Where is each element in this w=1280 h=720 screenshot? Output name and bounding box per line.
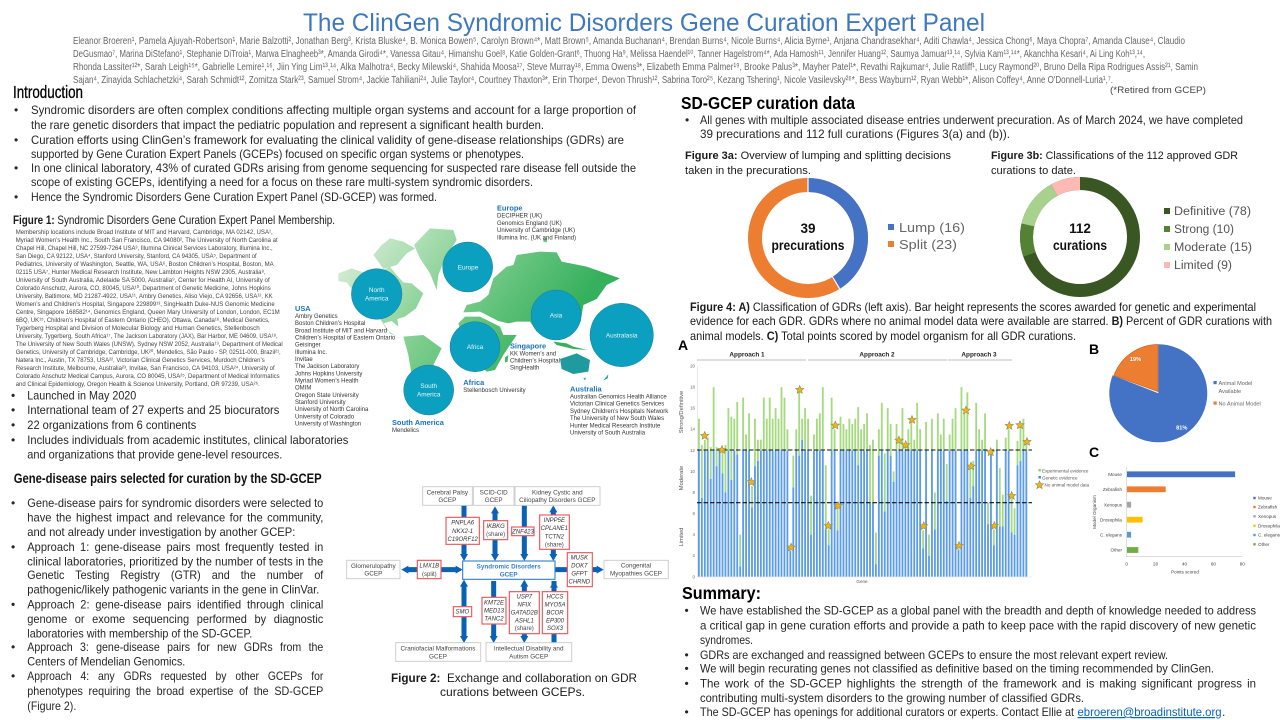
axis labels: C. elegans xyxy=(1100,532,1123,537)
heading: summary: Summary: xyxy=(682,583,761,603)
bars xyxy=(699,387,1026,577)
Australia members: University of South Australia xyxy=(570,430,646,436)
membership locations text: Centre, Singapore 168582¹⁴, Genomics England, Queen Mary University of London, London, EC1M xyxy=(16,309,280,316)
chart B: animal model pie: B xyxy=(1089,341,1099,357)
y axis: 4 xyxy=(693,532,696,537)
donut chart: curations xyxy=(1026,184,1134,290)
y axis: 0 xyxy=(693,574,696,579)
figure 4 caption: evidence for each GDR. GDRs where no animal model data were available are starred. B) Percent of GDR curations with xyxy=(690,315,1272,328)
approach bullets: and not already under investigation by another GCEP: xyxy=(27,525,295,539)
GCEP labels: Ciliopathy Disorders GCEP xyxy=(519,497,595,504)
membership locations text: Chapel Hill, Chapel Hill, NC 27599-7264 USA³, Illumina Clinical Services Laboratory, Illumina Inc., xyxy=(16,245,273,252)
author list xyxy=(73,36,1206,96)
Singapore members: Children’s Hospital xyxy=(510,359,560,365)
donut chart: precurations: precurations xyxy=(772,238,844,253)
approach bullets: Approach 2: gene-disease pairs identified through clinical xyxy=(27,598,323,612)
panel: curation data xyxy=(681,93,1243,141)
summary bullets: The work of the SD-GCEP highlights the strength of the framework and is making significant progress in xyxy=(700,676,1256,690)
legend: chart B xyxy=(1214,381,1261,407)
panel: summary xyxy=(682,583,1256,719)
approach bullets: Approach 3: gene-disease pairs for new GDRs from the xyxy=(27,640,324,654)
membership locations text: Colorado Anschutz Medical Campus, Aurora, CO 80045, USA²⁵, Department of Medical Informatics xyxy=(16,373,280,380)
gene labels: IKBKG xyxy=(487,524,505,530)
Europe members: Genomics England (UK) xyxy=(497,221,562,227)
summary bullets: The SD-GCEP has openings for additional curators or experts. Contact Ellie at xyxy=(700,705,1075,719)
figure 3a caption: Figure 3a: Overview of lumping and splitting decisions xyxy=(685,150,951,162)
membership locations text: Pediatrics, University of Washington, Seattle, WA, USA⁶, Boston Children’s Hospital, Boston, MA xyxy=(16,261,274,268)
continent labels: America xyxy=(417,392,441,398)
GCEP labels xyxy=(351,489,662,660)
Europe members: DECIPHER (UK) xyxy=(497,214,542,220)
y axis: 8 xyxy=(693,490,696,495)
gene labels: KMT2E xyxy=(484,600,505,606)
Australia members: Victorian Clinical Genetics Services xyxy=(570,402,664,408)
approach bullets: (Figure 2). xyxy=(27,699,76,713)
South America members: Mendelics xyxy=(392,428,419,434)
gene labels: BCOR xyxy=(546,610,564,616)
donut chart: precurations: 39 xyxy=(800,221,816,236)
continent labels: Australasia xyxy=(606,332,638,340)
introduction bullets: Curation efforts using ClinGen’s framework for evaluating the clinical validity of gene-disease relationships (GDRs) are xyxy=(31,133,624,147)
gene labels: INPP5E xyxy=(544,518,566,524)
USA members: Broad Institute of MIT and Harvard xyxy=(295,328,387,334)
gene labels: (share) xyxy=(545,542,564,548)
Singapore members: KK Women’s and xyxy=(510,352,556,358)
GCEP labels: Kidney Cystic and xyxy=(532,489,583,496)
figure 4 caption xyxy=(690,301,1272,343)
panel: gene-disease pairs xyxy=(11,471,324,713)
introduction bullets: In one clinical laboratory, 43% of curated GDRs arising from genome sequencing for suspected rare disease fell outside the xyxy=(31,161,636,175)
Australia members xyxy=(570,384,669,436)
gene labels: GFPT xyxy=(571,572,589,578)
approach bullets: clinical laboratories, prioritized by the number of tests in the xyxy=(27,554,324,568)
approach bullets: • xyxy=(11,496,15,510)
gene labels: (share) xyxy=(486,532,505,538)
y axis: 10 xyxy=(690,469,696,474)
legend: chart B: Animal Model xyxy=(1218,381,1252,387)
summary bullets: syndromes. xyxy=(700,633,753,647)
introduction bullets: • xyxy=(14,161,18,175)
gene labels: NKX2-1 xyxy=(452,529,473,535)
curation data bullet xyxy=(685,113,1243,141)
legend: chart C: C. elegans xyxy=(1258,533,1280,538)
approach bullets: pathogenic/likely pathogenic variants in the gene in ClinVar. xyxy=(27,582,319,596)
membership locations text: Women’s and Children’s Hospital, Singapore 229899¹³, SingHealth Duke-NUS Genomic Medicine xyxy=(16,301,275,308)
y axis: 6 xyxy=(693,511,696,516)
heading: curation data: SD-GCEP curation data xyxy=(681,93,855,113)
gene labels: MYO5A xyxy=(545,602,565,608)
approach bullets: have the highest impact and relevance for the community, xyxy=(27,510,323,524)
USA members: Johns Hopkins University xyxy=(295,371,362,377)
Australia members: Hunter Medical Research Institute xyxy=(570,423,661,429)
membership bullets: International team of 27 experts and 25 biocurators xyxy=(27,403,279,417)
continent labels: Europe xyxy=(458,264,479,272)
legend: curations xyxy=(1164,206,1252,272)
legend: curations: Moderate (15) xyxy=(1174,242,1252,254)
legend: chart A: Genetic evidence xyxy=(1042,475,1078,480)
gene labels: ASHL1 xyxy=(514,618,534,624)
membership locations text: Myriad Women’s Health Inc., South San Francisco, CA 94080², The University of North Carolina at xyxy=(16,237,278,244)
heading: introduction: Introduction xyxy=(13,82,83,102)
membership locations text: Natera Inc., Austin, TX 78753, USA²², Victorian Clinical Genetics Services, Murdoch Children’s xyxy=(16,357,265,364)
legend: chart C: Xenopus xyxy=(1258,514,1277,519)
figure 4 caption: Figure 4: A) Classification of GDRs (left axis). Bar height represents the scores awarded for genetic and experimental xyxy=(690,301,1256,314)
y axis xyxy=(679,364,1032,584)
y axis: 12 xyxy=(690,448,696,453)
legend: chart B: Available xyxy=(1218,389,1241,395)
introduction bullets: supported by Gene Curation Expert Panels (GCEPs) focused on specific organ systems or phenotypes. xyxy=(31,147,524,161)
gene labels: (share) xyxy=(515,626,534,632)
axis labels xyxy=(1092,472,1245,575)
y axis: Strong/Definitive xyxy=(679,391,685,433)
arrows xyxy=(407,505,597,643)
membership bullets: • xyxy=(11,433,15,447)
gene labels: EP300 xyxy=(546,618,565,624)
summary bullets: GDRs are exchanged and reassigned between GCEPs to ensure the most relevant expert review. xyxy=(700,648,1168,662)
membership locations text: Membership locations include Broad Institute of MIT and Harvard, Cambridge, MA 02142, USA¹, xyxy=(16,229,273,236)
introduction bullets: Hence the Syndromic Disorders Gene Curation Expert Panel (SD-GCEP) was formed. xyxy=(31,190,437,204)
USA members: Oregon State University xyxy=(295,393,359,399)
membership locations text: San Diego, CA 92122, USA⁴, Stanford University, Stanford, CA 94305, USA⁵, Department of xyxy=(16,253,257,260)
USA members: Boston Children’s Hospital xyxy=(295,321,365,327)
Africa members: Stellenbosch University xyxy=(463,388,526,394)
membership locations text: 02115 USA⁷, Hunter Medical Research Institute, New Lambton Heights NSW 2305, Australia⁸, xyxy=(16,269,266,276)
axis labels: Xenopus xyxy=(1104,502,1123,507)
membership locations text: Genetics, University of Cambridge, Cambridge, UK²⁰, Mendelics, São Paulo - SP, 02511-000, Brazil²¹, xyxy=(16,349,281,356)
GCEP labels: Glomerulopathy xyxy=(351,563,397,570)
introduction bullets: scope of existing GCEPs, identifying a need for a focus on these rare multi-system syndromic disorders. xyxy=(31,175,533,189)
summary bullets: contributing multi-system disorders to the growing number of classified GDRs. xyxy=(700,691,1084,705)
membership bullets: 22 organizations from 6 continents xyxy=(27,418,196,432)
continent labels: North xyxy=(369,287,385,294)
Europe members xyxy=(497,204,576,241)
approach bullets: Approach 1: gene-disease pairs most frequently tested in xyxy=(27,540,323,554)
figure 3b caption: curations to date. xyxy=(991,165,1076,177)
introduction bullets: • xyxy=(14,103,18,117)
approach bullets: genome or exome sequencing performed by diagnostic xyxy=(27,612,323,626)
USA members: Ambry Genetics xyxy=(295,314,338,320)
pie slices: 19% xyxy=(1130,357,1141,363)
legend: chart A: No animal model data xyxy=(1044,483,1090,488)
continent labels: America xyxy=(365,296,389,302)
axis labels: Mouse xyxy=(1108,472,1122,477)
summary bullets: • xyxy=(684,662,689,676)
summary bullets: ebroeren@broadinstitute.org xyxy=(1078,705,1222,719)
legend: chart A xyxy=(1035,468,1090,489)
curation data bullet: All genes with multiple associated disease entries underwent precuration. As of March 2024, we have completed xyxy=(700,113,1243,127)
membership locations text: Colorado Anschutz, Aurora, CO, 80045, USA¹⁰, Department of Genetic Medicine, Johns Hopkins xyxy=(16,285,271,292)
Singapore members xyxy=(510,342,560,372)
y axis: 14 xyxy=(690,427,696,432)
South America members xyxy=(392,418,445,434)
introduction bullets: Syndromic disorders are often complex conditions affecting multiple organ systems and account for a large proportion of xyxy=(31,103,637,117)
legend: precurations xyxy=(888,220,965,252)
Syndromic Disorders GCEP box: Syndromic Disorders xyxy=(477,563,541,570)
GCEP labels: SCID-CID xyxy=(480,489,508,496)
Africa members: Africa xyxy=(463,378,485,387)
membership locations text: and Clinical Epidemiology, Oregon Health & Science University, Portland, OR 97239, USA²⁶. xyxy=(16,381,260,388)
figure 2 caption: Figure 2: Exchange and collaboration on GDR xyxy=(391,671,637,685)
donut chart: curations: 112 xyxy=(1069,221,1091,236)
figure 4 caption: animal models. C) Total points scored by model organism for all GDR curations. xyxy=(690,330,1076,343)
Australia members: Sydney Children’s Hospitals Network xyxy=(570,409,669,415)
gene labels: NFIX xyxy=(518,602,532,608)
USA members: Stanford University xyxy=(295,400,346,406)
pie slices: 81% xyxy=(1176,425,1187,431)
continent labels: Asia xyxy=(550,312,563,320)
legend: chart C: Zebrafish xyxy=(1258,505,1278,510)
axis labels: Drosophila xyxy=(1100,517,1122,522)
USA members: Illumina Inc. xyxy=(295,350,327,356)
membership locations text xyxy=(16,229,283,388)
approach bullets: • xyxy=(11,540,15,554)
continent labels xyxy=(365,264,638,398)
USA members: OMIM xyxy=(295,386,311,392)
USA members: The Jackson Laboratory xyxy=(295,364,359,370)
introduction bullets: • xyxy=(14,190,18,204)
stars: no animal model data xyxy=(701,386,1031,551)
membership locations text: The University of New South Wales (UNSW), Sydney NSW 2052, Australia¹⁹, Department of Medical xyxy=(16,341,283,348)
gene labels: LMX1B xyxy=(420,564,439,570)
GCEP labels: Congenital xyxy=(621,562,651,569)
approach bullets xyxy=(11,496,324,713)
gene labels: GATAD2B xyxy=(511,610,538,616)
gene labels: DOK7 xyxy=(571,564,588,570)
USA members: University of North Carolina xyxy=(295,407,369,413)
approach bullets: Gene-disease pairs for syndromic disorders were selected to xyxy=(27,496,324,510)
legend: chart B: No Animal Model xyxy=(1218,401,1261,407)
arrowheads xyxy=(401,505,604,643)
continent labels: South xyxy=(420,383,437,390)
Singapore members: SingHealth xyxy=(510,366,539,372)
approach bullets: • xyxy=(11,598,15,612)
GCEP labels: Intellectual Disability and xyxy=(494,645,564,652)
Singapore members: Singapore xyxy=(510,342,546,350)
figure 2: exchange diagram xyxy=(347,487,668,661)
gene labels: C19ORF12 xyxy=(448,537,478,543)
y axis: 20 xyxy=(690,364,696,368)
legend: chart A: Experimental evidence xyxy=(1042,468,1089,473)
approach bullets: Approach 4: any GDRs requested by other GCEPs for xyxy=(27,669,323,683)
approach bullets: Genetic Testing Registry (GTR) and the number of xyxy=(27,568,324,582)
membership bullets: • xyxy=(11,418,15,432)
membership bullets: Includes individuals from academic institutes, clinical laboratories xyxy=(27,433,348,447)
threshold lines xyxy=(697,450,1032,503)
summary bullets xyxy=(684,604,1256,719)
curation data bullet: • xyxy=(685,113,689,127)
map landmasses xyxy=(338,228,620,380)
USA members: USA xyxy=(295,304,311,313)
chart A: GDR classification bars xyxy=(678,337,1090,584)
USA members: Myriad Women’s Health xyxy=(295,378,358,384)
USA members: Geisinger xyxy=(295,343,321,349)
approach headers xyxy=(697,352,1012,360)
approach headers: Approach 2 xyxy=(859,352,895,358)
figure 1 caption: Figure 1: Syndromic Disorders Gene Curation Expert Panel Membership. xyxy=(13,213,335,227)
USA members: University of Colorado xyxy=(295,414,355,420)
axis labels: 20 xyxy=(1153,562,1159,566)
summary bullets: • xyxy=(684,676,689,690)
membership bullets: • xyxy=(11,403,15,417)
axis labels: 0 xyxy=(1125,562,1128,566)
Syndromic Disorders GCEP box: GCEP xyxy=(500,571,518,578)
chart C: points by model organism: C xyxy=(1089,444,1099,460)
heading: gene-disease pairs: Gene-disease pairs selected for curation by the SD-GCEP xyxy=(14,471,322,487)
legend: curations: Strong (10) xyxy=(1174,224,1234,236)
figure 3a caption xyxy=(685,150,951,177)
Australia members: The University of New South Wales xyxy=(570,416,664,422)
gene labels: CPLANE1 xyxy=(541,526,568,532)
introduction bullets: the rare genetic disorders that impact the pediatric population and represent a significant health burden. xyxy=(31,118,544,132)
y axis: 2 xyxy=(693,553,696,558)
Europe members: University of Cambridge (UK) xyxy=(497,228,575,234)
South America members: South America xyxy=(392,418,445,427)
gene labels: TCTN2 xyxy=(545,534,565,540)
membership locations text: Research Institute, Melbourne, Australia²³, Invitae, San Francisco, CA 94103, USA²⁴, University of xyxy=(16,365,275,372)
horizontal bars xyxy=(1127,471,1235,553)
axis labels: 80 xyxy=(1240,562,1245,566)
gene labels: USP7 xyxy=(517,594,533,600)
figure 3a caption: taken in the precurations. xyxy=(685,165,811,177)
title: The ClinGen Syndromic Disorders Gene Curation Expert Panel xyxy=(303,9,985,37)
introduction bullets: • xyxy=(14,133,18,147)
legend: chart C: Drosophila xyxy=(1258,523,1280,528)
y axis: Moderate xyxy=(679,466,685,490)
donut chart: curations: curations xyxy=(1053,238,1107,253)
membership bullets: • xyxy=(11,388,15,402)
axis labels: 40 xyxy=(1182,562,1187,566)
continent circles xyxy=(351,242,653,415)
GCEP labels: Myopathies GCEP xyxy=(610,571,662,578)
gene labels: TANC2 xyxy=(484,617,504,623)
Europe members: Europe xyxy=(497,204,522,212)
figure 3b caption xyxy=(991,150,1238,177)
panel letter A: A xyxy=(678,337,688,353)
introduction bullets xyxy=(14,103,637,204)
y axis: 18 xyxy=(690,384,696,390)
Africa members xyxy=(463,378,526,394)
approach headers: Approach 1 xyxy=(729,352,765,358)
summary bullets: • xyxy=(684,705,689,719)
gene labels: MUSK xyxy=(571,556,589,562)
axis labels: Other xyxy=(1110,548,1122,553)
membership locations text: University, Baltimore, MD 21287-4922, USA¹¹, Ambry Genetics, Aliso Viejo, CA 92656, USA¹², KK xyxy=(16,293,273,300)
gene labels: SOX3 xyxy=(547,626,564,632)
membership bullets: and organizations that provide gene-level resources. xyxy=(27,448,282,462)
figure 2 caption: curations between GCEPs. xyxy=(440,685,585,699)
GCEP labels: GCEP xyxy=(438,497,456,504)
chart B: animal model pie xyxy=(1089,341,1261,442)
summary bullets: a critical gap in gene curation efforts and provide a path to keep pace with the rapid discovery of new genetic xyxy=(700,618,1256,632)
figure 2 caption xyxy=(391,671,637,699)
axis labels: Points scored xyxy=(1171,570,1199,575)
approach headers: Approach 3 xyxy=(961,352,997,358)
y axis: Gene xyxy=(856,579,868,584)
axes xyxy=(1127,467,1242,557)
donut chart: precurations xyxy=(755,178,861,291)
gene labels: SMO xyxy=(456,610,469,616)
USA members xyxy=(295,304,396,428)
panel: introduction xyxy=(13,82,637,204)
gene labels: MED13 xyxy=(484,609,505,615)
summary bullets: . xyxy=(1222,705,1225,719)
y axis: 16 xyxy=(690,406,696,411)
approach bullets: • xyxy=(11,669,15,683)
approach bullets: Centers of Mendelian Genomics. xyxy=(27,654,185,668)
approach bullets: • xyxy=(11,640,15,654)
gene boxes xyxy=(417,515,592,634)
world map figure xyxy=(295,204,669,436)
legend: chart C: Mouse xyxy=(1258,496,1272,501)
membership locations text: Tygerberg Hospital and Division of Molecular Biology and Human Genetics, Stellenbosch xyxy=(16,325,260,332)
legend: precurations: Split (23) xyxy=(899,237,957,252)
membership bullets: Launched in May 2020 xyxy=(27,388,137,402)
Australia members: Australia xyxy=(570,384,603,394)
author list: (*Retired from GCEP) xyxy=(1110,85,1206,96)
Syndromic Disorders GCEP box xyxy=(463,561,555,579)
axis labels: 60 xyxy=(1211,562,1216,566)
GCEP labels: GCEP xyxy=(485,497,503,504)
gene labels: HCCS xyxy=(547,594,563,600)
curation data bullet: 39 precurations and 112 full curations (Figures 3(a) and (b)). xyxy=(700,127,1010,141)
summary bullets: We will begin recurating genes not classified as definitive based on the timing recommended by ClinGen. xyxy=(700,662,1214,676)
gene labels: PNPLA6 xyxy=(451,521,475,527)
y axis: Limited xyxy=(679,528,685,546)
GCEP labels: Cerebral Palsy xyxy=(427,489,469,496)
gene labels: (split) xyxy=(422,572,437,578)
legend: curations: Definitive (78) xyxy=(1174,206,1251,218)
gene labels: ZNF423 xyxy=(511,529,534,535)
legend: curations: Limited (9) xyxy=(1174,260,1232,272)
membership bullets xyxy=(11,388,348,462)
legend: chart C xyxy=(1253,496,1280,547)
approach bullets: phenotypes requiring the broad expertise of the SD-GCEP xyxy=(27,684,323,698)
GCEP labels: Craniofacial Malformations xyxy=(401,645,475,652)
Europe members: Illumina Inc. (UK and Finland) xyxy=(497,235,576,241)
summary bullets: • xyxy=(684,604,689,618)
GCEP labels: Autism GCEP xyxy=(509,653,548,660)
USA members: Children’s Hospital of Eastern Ontario xyxy=(295,336,396,342)
axis labels: Zebrafish xyxy=(1103,487,1122,492)
GCEP labels: GCEP xyxy=(429,653,447,660)
pie slices xyxy=(1109,344,1207,442)
membership locations text: University, Tygerberg, South Africa¹⁷, The Jackson Laboratory (JAX), Bar Harbor, ME 04609, USA¹⁸, xyxy=(16,333,278,340)
gene labels: CHRND xyxy=(569,580,591,586)
summary bullets: • xyxy=(684,648,689,662)
approach bullets: laboratories with membership of the SD-GCEP. xyxy=(27,626,252,640)
gene labels xyxy=(420,518,591,632)
chart C: points by model organism xyxy=(1089,444,1280,575)
GCEP boxes xyxy=(347,487,668,661)
USA members: University of Washington xyxy=(295,422,361,428)
GCEP labels: GCEP xyxy=(364,571,382,578)
Australia members: Australian Genomics Health Alliance xyxy=(570,395,667,401)
USA members: Invitae xyxy=(295,357,313,363)
axis labels: Model Organism xyxy=(1092,495,1097,529)
legend: precurations: Lump (16) xyxy=(899,220,965,235)
continent labels: Africa xyxy=(467,344,484,351)
figure 3b caption: Figure 3b: Classifications of the 112 approved GDR xyxy=(991,150,1238,162)
membership locations text: 6BQ, UK¹⁵, Children’s Hospital of Eastern Ontario (CHEO), Ottawa, Canada¹⁶, Medical Genetics, xyxy=(16,317,270,324)
membership locations text: University of South Australia, Adelaide SA 5000, Australia⁹, Center for Health AI, University of xyxy=(16,277,270,284)
legend: chart C: Other xyxy=(1258,542,1270,547)
